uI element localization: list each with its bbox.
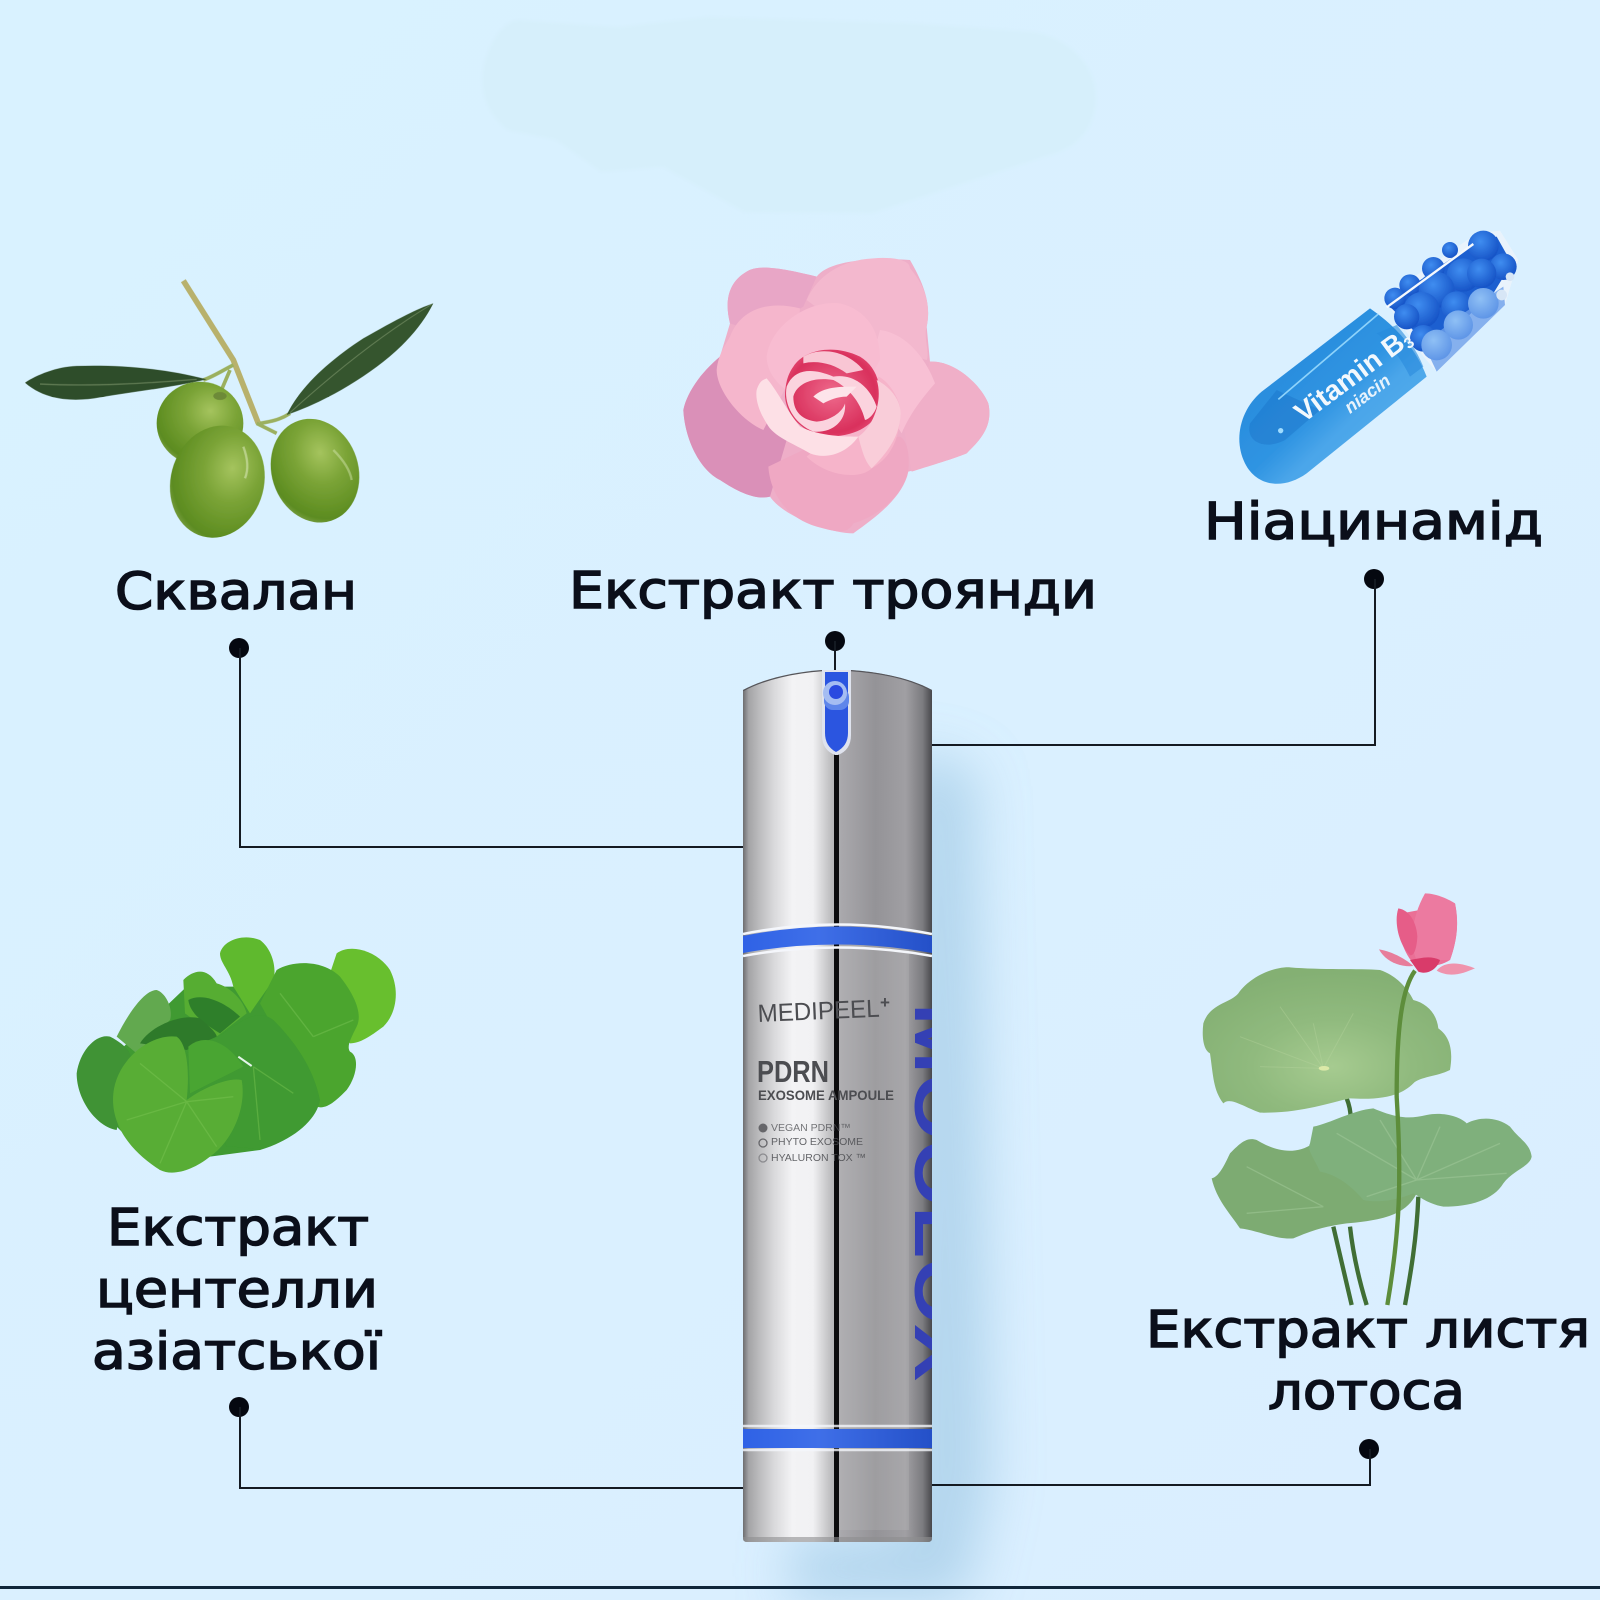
label: centella extract: азіатської xyxy=(92,1323,382,1382)
blue band top xyxy=(743,926,932,953)
bottle text: list: VEGAN PDRN™ xyxy=(771,1122,851,1134)
bottom rule xyxy=(0,1586,1600,1589)
icon: olive branch xyxy=(25,281,433,548)
icon: lotus plant xyxy=(1203,893,1532,1305)
label: centella extract xyxy=(92,1199,382,1382)
label: rose extract: Екстракт троянди xyxy=(569,562,1097,621)
bottle text: PDRN: PDRN xyxy=(757,1054,829,1089)
bottle shadow xyxy=(790,750,990,1600)
icon: vitamin B3 capsule: niacin xyxy=(1340,370,1394,417)
icon: vitamin B3 capsule xyxy=(1239,231,1518,484)
label: niacinamide: Ніацинамід xyxy=(1204,493,1543,552)
icon: pink rose xyxy=(683,258,989,533)
bottle text: list: HYALURON TOX ™ xyxy=(771,1152,866,1164)
label: centella extract: Екстракт xyxy=(107,1199,369,1258)
icon: vitamin B3 capsule: Vitamin B xyxy=(1288,327,1410,428)
label: lotus leaf extract: лотоса xyxy=(1268,1363,1465,1422)
product bottle xyxy=(743,670,932,1542)
label: squalane: Сквалан xyxy=(115,563,357,622)
bottle text: brand: MEDIPEEL xyxy=(757,995,880,1028)
connector: rose extract xyxy=(825,631,845,674)
connector: squalane xyxy=(229,638,743,847)
icon: centella leaves xyxy=(77,937,396,1173)
bottle text: list xyxy=(758,1122,866,1164)
bottle text: plus: + xyxy=(880,993,890,1012)
vertical brand text: MOOLOX xyxy=(899,1003,979,1381)
icon: vitamin B3 capsule: 3 xyxy=(1401,334,1418,353)
blue band bottom xyxy=(743,1429,932,1448)
label: centella extract: центелли xyxy=(96,1261,378,1320)
faint smudge at top xyxy=(482,17,1096,213)
connector: niacinamide xyxy=(932,569,1384,745)
label: lotus leaf extract xyxy=(1146,1301,1590,1422)
label: lotus leaf extract: Екстракт листя xyxy=(1146,1301,1590,1360)
pump nozzle xyxy=(822,670,851,755)
bottle body xyxy=(743,665,932,1545)
bottle text: list: PHYTO EXOSOME xyxy=(771,1136,863,1148)
bottle text: subtitle: EXOSOME AMPOULE xyxy=(758,1087,894,1103)
connector: centella xyxy=(229,1397,743,1488)
connector: lotus leaf xyxy=(932,1439,1379,1485)
